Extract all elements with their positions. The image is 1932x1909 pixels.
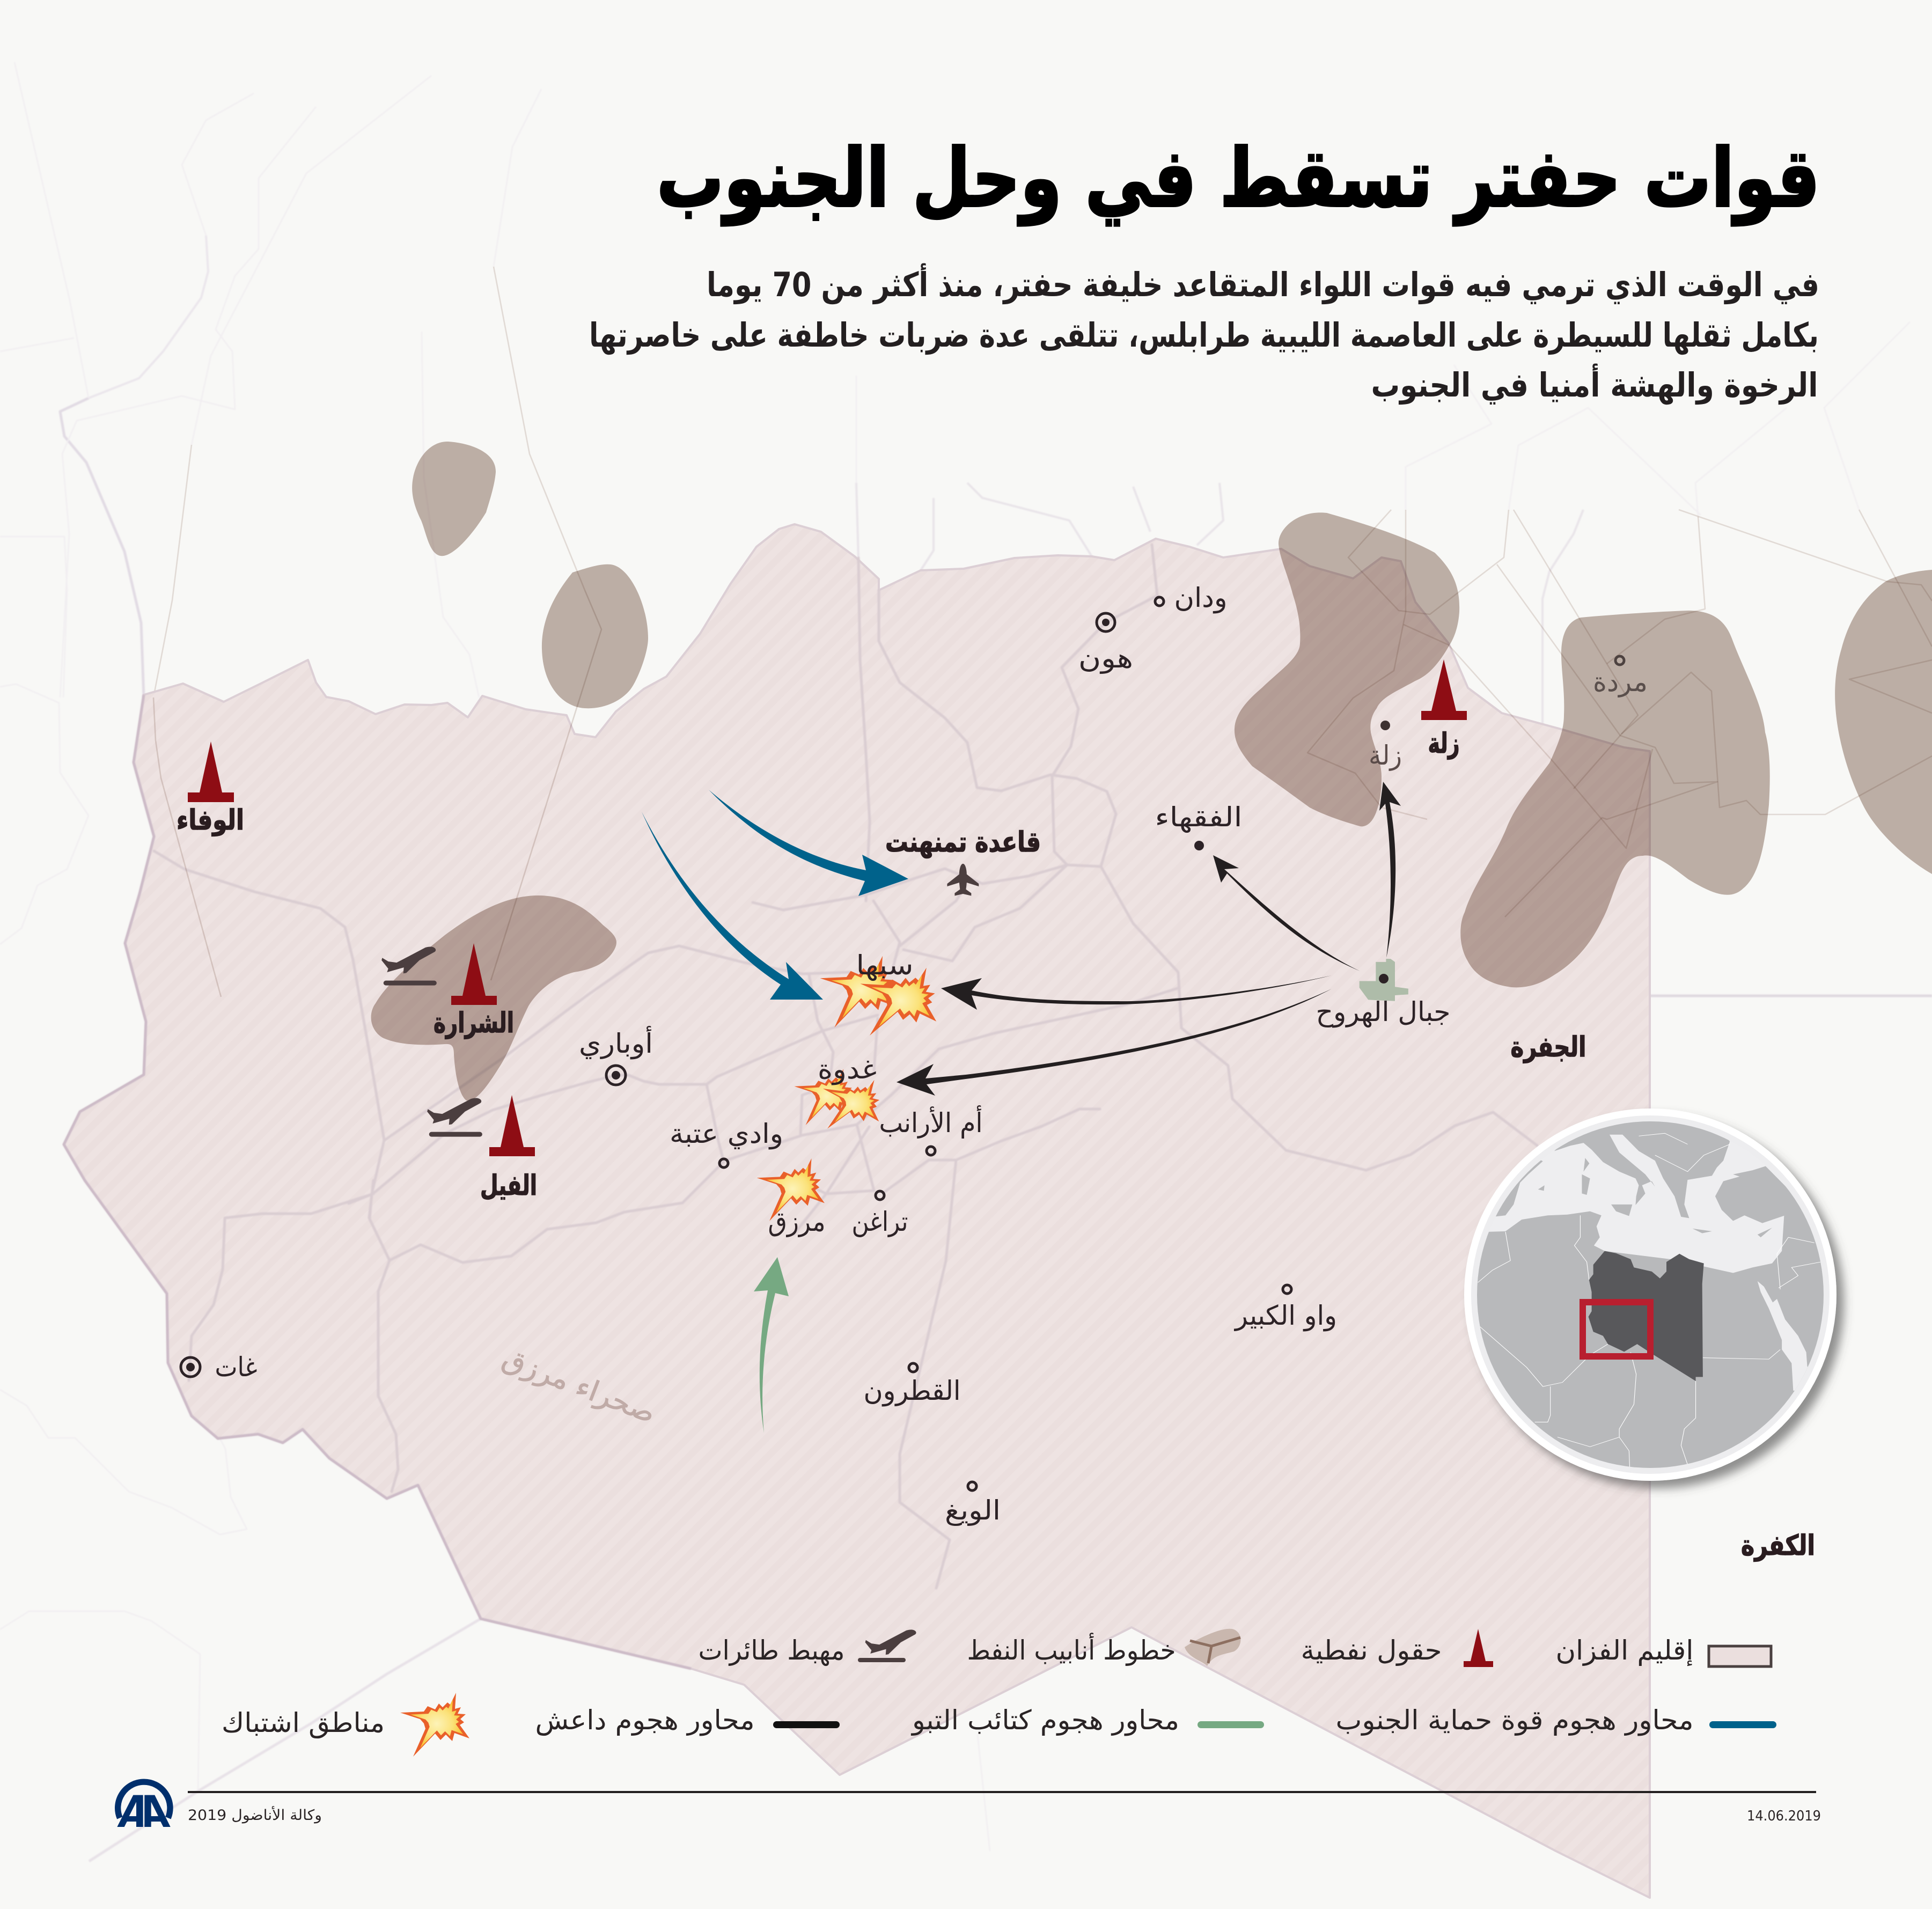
blob: Sharara — [371, 895, 616, 1100]
city markers — [181, 597, 1624, 1491]
legend: oil fields: حقول نفطية — [1301, 1635, 1442, 1666]
oil field and base labels: الفيل — [480, 1170, 537, 1202]
legend: ISIS attacks: محاور هجوم داعش — [535, 1705, 754, 1736]
land: Europe — [1554, 1114, 1730, 1218]
oil field and base labels: زلة — [1428, 728, 1459, 760]
oil pipeline zone blobs — [371, 442, 1932, 1100]
icon: airstrip Sharara — [381, 947, 437, 986]
clash: Sebha left — [820, 956, 898, 1027]
city labels: مردة — [1593, 666, 1648, 697]
globe frame — [1464, 1108, 1836, 1481]
clash: Sebha right — [855, 961, 942, 1042]
icon: airstrip Fil — [427, 1098, 482, 1137]
attack arrow: blue to Sebha — [642, 812, 823, 1000]
roads — [154, 545, 1537, 1588]
western and southern border emphasis — [64, 695, 691, 1669]
country borders — [1478, 1133, 1821, 1467]
oil field and base labels — [177, 728, 1815, 1562]
blob: north-west 2 — [542, 564, 648, 708]
land: Iberia — [1496, 1160, 1543, 1217]
label: Murzuq desert: صحراء مرزق — [498, 1342, 660, 1430]
city labels: غدوة — [818, 1054, 877, 1085]
legend: clash zones — [222, 1693, 469, 1757]
city labels — [215, 582, 1648, 1526]
icon: oil field Fil — [489, 1095, 535, 1156]
city labels: تراغن — [852, 1206, 908, 1237]
oil field and base labels: قاعدة تمنهنت — [885, 826, 1041, 858]
land: Turkey — [1715, 1166, 1815, 1223]
city labels: الفقهاء — [1155, 802, 1243, 833]
faint thin pipelines outside the map — [153, 267, 585, 697]
intro text: الرخوة والهشة أمنيا في الجنوب — [1371, 363, 1818, 405]
blob: north-west 1 — [412, 442, 496, 556]
city labels: مرزق — [768, 1206, 825, 1237]
islands — [1538, 1158, 1772, 1237]
region: Fezzan — [64, 524, 1650, 1898]
land: Africa and Middle East — [1477, 1212, 1824, 1468]
city labels: أوباري — [579, 1026, 653, 1060]
blob: Zella — [1235, 512, 1459, 826]
icon: oil field Wafa — [188, 741, 234, 802]
clash: Murzuq — [757, 1158, 825, 1221]
attack arrow: blue to Tamanhant — [709, 790, 908, 896]
city labels: زلة — [1369, 740, 1402, 771]
legend: oil fields — [1301, 1629, 1493, 1667]
legend: Fezzan region: إقليم الفزان — [1556, 1635, 1693, 1666]
legend: Tebu brigades attacks: محاور هجوم كتائب التبو — [910, 1705, 1179, 1736]
legend: pipelines: خطوط أنابيب النفط — [967, 1633, 1176, 1666]
globe map — [1477, 1121, 1824, 1468]
city labels: جبال الهروح — [1316, 996, 1451, 1028]
icon: Haruj mountains — [1360, 959, 1408, 1001]
attack arrow: black to Sebha — [941, 975, 1332, 1010]
city labels: الويغ — [945, 1495, 1001, 1526]
attack arrow: black to Zella — [1379, 782, 1401, 958]
oil field and base labels: الوفاء — [177, 804, 244, 836]
footer credit: وكالة الأناضول 2019 — [188, 1805, 322, 1824]
legend: south protection force attacks: محاور هجوم قوة حماية الجنوب — [1336, 1705, 1693, 1736]
oil field and base labels: الجفرة — [1511, 1031, 1586, 1063]
city labels: سبها — [856, 950, 913, 981]
city labels: هون — [1078, 643, 1133, 674]
city labels: أم الأرانب — [879, 1105, 983, 1139]
blob: eastern edge — [1835, 570, 1932, 874]
city labels: القطرون — [864, 1375, 960, 1407]
legend: airstrips — [699, 1629, 916, 1666]
sea: Red Sea — [1758, 1281, 1808, 1391]
icon: oil field Sharara — [451, 943, 497, 1005]
pipelines — [153, 510, 1932, 997]
legend: ISIS attacks — [535, 1705, 840, 1736]
city labels: واو الكبير — [1233, 1300, 1337, 1332]
clash: Ghaduwa right — [816, 1071, 886, 1137]
legend: Fezzan region — [1556, 1635, 1771, 1666]
logo: Anadolu Agency — [117, 1782, 171, 1827]
clash: Ghaduwa left — [794, 1069, 855, 1125]
blob: Marada — [1460, 611, 1770, 987]
city labels: ودان — [1174, 582, 1228, 614]
footer date: 14.06.2019 — [1747, 1808, 1821, 1824]
legend — [222, 1629, 1776, 1757]
legend: pipelines — [967, 1629, 1240, 1666]
Libya — [1589, 1251, 1704, 1381]
attack arrow: black to Fuqaha — [1213, 855, 1360, 971]
city labels: وادي عتبة — [670, 1118, 783, 1150]
footer rule — [188, 1791, 1816, 1793]
city labels: غات — [215, 1352, 258, 1383]
intro text — [589, 263, 1819, 405]
icon: Tamanhant airbase plane — [947, 864, 979, 896]
icon: oil field Zella — [1421, 659, 1467, 720]
inset globe — [1464, 1108, 1850, 1495]
inset location square — [1583, 1302, 1650, 1356]
oil field and base labels: الكفرة — [1741, 1530, 1815, 1562]
attack arrow: black to Ghaduwa — [897, 989, 1332, 1096]
oil field and base labels: الشرارة — [434, 1007, 514, 1039]
legend: airstrips: مهبط طائرات — [699, 1635, 844, 1666]
legend: clash zones: مناطق اشتباك — [222, 1707, 385, 1738]
attack arrow: green to Murzuq — [754, 1257, 789, 1433]
